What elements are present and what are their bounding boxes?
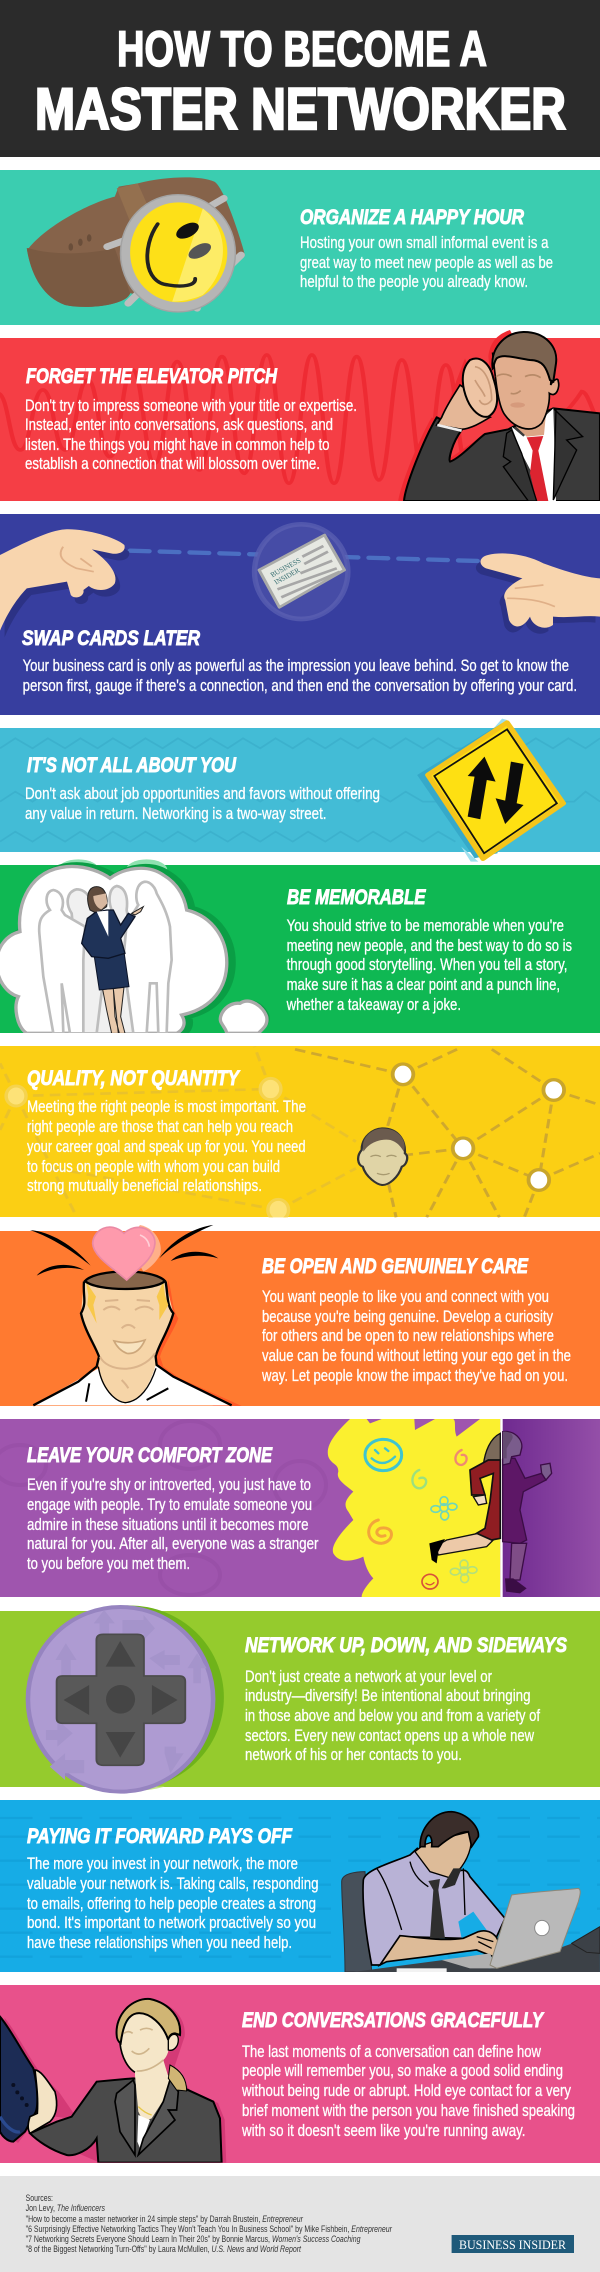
footer panel [0,2176,600,2272]
body text: valuable your network is. Taking calls, responding [27,1874,318,1893]
body text: your career goal and speak up for you. You need [27,1137,306,1156]
illustration: hands passing card [0,524,600,637]
illustration: woman shaking hands [0,1999,226,2164]
body text: The more you invest in your network, the more [27,1854,298,1873]
swirl pattern [0,1421,326,1595]
body text: strong mutually beneficial relationships. [27,1176,262,1195]
title: HOW TO BECOME A [117,21,487,77]
heading: QUALITY, NOT QUANTITY [27,1067,241,1090]
heading: ORGANIZE A HAPPY HOUR [300,206,525,229]
sources: "6 Surprisingly Effective Networking Tactics They Won't Teach You In Business School" by Mike Fishbein, Entrepreneur [26,2224,393,2234]
illustration: hands passing card: INSIDER [273,566,302,586]
dash pattern [0,1818,600,1957]
panel: be memorable [0,859,600,1033]
sources: "7 Networking Secrets Everyone Should Learn In Their 20s" by Bonnie Marcus, Women's Success Coaching [26,2234,360,2244]
body text [241,2042,575,2140]
heading: PAYING IT FORWARD PAYS OFF [27,1825,293,1848]
panel: quality, not quantity [0,1046,600,1221]
sources: Sources: [26,2193,53,2203]
body text: to you before you met them. [27,1554,190,1573]
body text: Instead, enter into conversations, ask questions, and [25,415,333,434]
body text: with so it doesn't seem like you're running away. [241,2121,526,2140]
sources [26,2193,393,2254]
heading: LEAVE YOUR COMFORT ZONE [27,1444,273,1467]
body text: whether a takeaway or a joke. [286,995,461,1014]
illustration: d-pad circle [28,1605,224,1792]
sources: "8 of the Biggest Networking Turn-Offs" by Laura McMullen, U.S. News and World Report [26,2244,301,2254]
title banner [0,0,600,157]
logo: business insider: BUSINESS INSIDER [459,2238,567,2252]
panel: organize a happy hour [0,170,600,325]
body text: any value in return. Networking is a two-way street. [25,804,326,823]
body text: Don't ask about job opportunities and favors without offering [25,784,380,803]
body text [23,656,577,695]
body text: Even if you're shy or introverted, you just have to [27,1475,311,1494]
network diagram [0,1047,600,1221]
sources: Jon Levy, The Influencers [26,2203,105,2213]
icon: two-way road sign [417,719,563,862]
panel: paying it forward pays off [0,1800,600,1972]
body text: to emails, offering to help people creates a strong [27,1894,316,1913]
panel: forget the elevator pitch [0,330,600,501]
illustration: woman leaving comfort zone [328,1419,600,1597]
panel: network up, down, and sideways [0,1605,600,1792]
body text [286,916,572,1014]
body text: right people are those that can help you reach [27,1117,293,1136]
body text: natural for you. After all, everyone was a stranger [27,1534,319,1553]
body text: network of his or her contacts to you. [245,1745,462,1764]
body text: industry—diversify! Be intentional about bringing [245,1686,530,1705]
title [35,21,566,142]
heading: FORGET THE ELEVATOR PITCH [26,365,278,388]
body text [25,784,380,823]
body text: engage with people. Try to emulate someone you [27,1495,312,1514]
sources: "How to become a master networker in 24 simple steps" by Darrah Brustein, Entrepreneur [26,2214,304,2224]
body text: admire in these situations until it becomes more [27,1515,308,1534]
illustration: man on phone at laptop [342,1812,600,1972]
body text: helpful to the people you already know. [300,272,528,291]
heading: SWAP CARDS LATER [22,627,201,650]
body text [25,396,357,473]
body text [261,1287,571,1385]
heading: BE OPEN AND GENUINELY CARE [262,1255,529,1278]
body text [300,233,553,291]
panel: swap cards later [0,514,600,715]
body text: establish a connection that will blossom over time. [25,454,320,473]
icon: man's face [358,1128,407,1185]
panel: end conversations gracefully [0,1985,600,2164]
body text: Meeting the right people is most important. The [27,1097,306,1116]
illustration: hands passing card: BUSINESS [269,557,303,579]
body text: Don't just create a network at your level or [245,1667,492,1686]
body text: to focus on people with whom you can build [27,1157,280,1176]
body text: Don't try to impress someone with your title or expertise. [25,396,357,415]
chevron pattern [0,738,600,842]
illustration: man with giant ear [398,330,600,501]
body text: bond. It's important to network proactively so you [27,1913,316,1932]
body text [27,1854,318,1952]
illustration: open head with heart [30,1225,242,1406]
panel: be open and genuinely care [0,1225,600,1406]
icon: smiley wristwatch [27,177,245,312]
body text [245,1667,540,1764]
panel: leave your comfort zone [0,1419,600,1597]
body text: have these relationships when you need help. [27,1933,292,1952]
illustration: woman in thought cloud [0,859,270,1033]
body text [27,1097,306,1195]
body text: listen. The things you might have in common help to [25,435,330,454]
body text [27,1475,319,1573]
heading: BE MEMORABLE [287,886,426,909]
heading: IT'S NOT ALL ABOUT YOU [27,754,237,777]
sound wave [0,355,600,483]
panel: it's not all about you [0,719,600,862]
